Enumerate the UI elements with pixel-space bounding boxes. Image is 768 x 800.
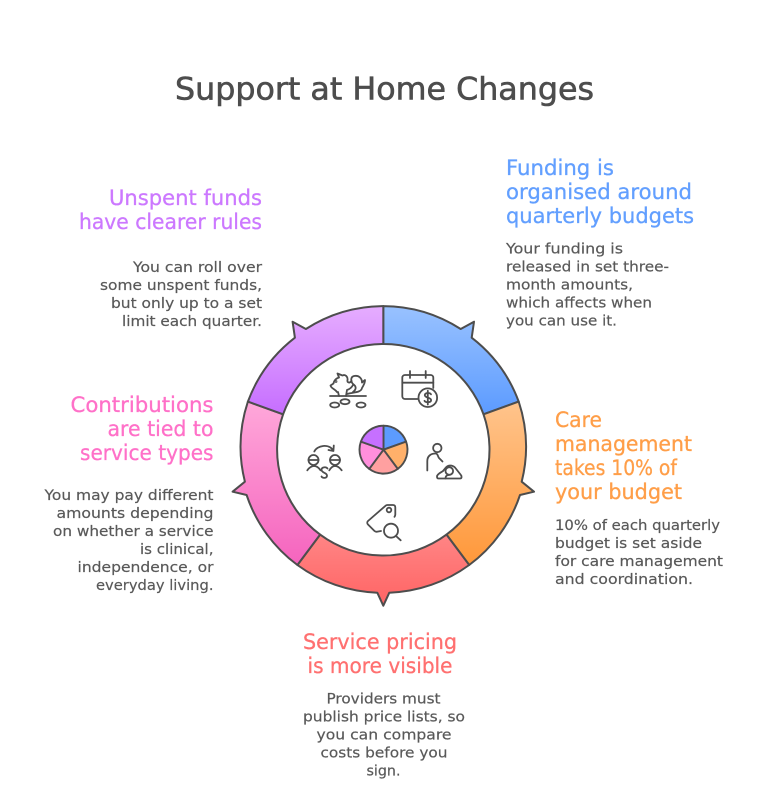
text: care management description: and coordination. (555, 572, 693, 588)
heading: contributions (70, 393, 214, 466)
ring segment: purple (248, 306, 383, 414)
text: unspent funds description: limit each quarter. (122, 314, 262, 330)
heading: unspent funds: have clearer rules (79, 210, 262, 235)
title: Support at Home Changes (175, 72, 594, 108)
text: service pricing description (303, 692, 465, 780)
icon: caregiver with person (427, 444, 462, 478)
text: contributions description: amounts depending (56, 506, 214, 522)
text: funding description: released in set three- (506, 260, 669, 276)
heading: service pricing: Service pricing (303, 630, 457, 655)
text: care management description: 10% of each quarterly (555, 518, 720, 534)
text: funding description (505, 242, 669, 330)
heading: unspent funds (79, 186, 262, 235)
text: contributions description: is clinical, (140, 542, 214, 558)
icon: money exchange between people (307, 446, 342, 478)
text: contributions description (43, 488, 214, 594)
text: care management description: for care management (555, 554, 723, 570)
text: funding description: which affects when (506, 296, 652, 312)
panel: funding (505, 156, 694, 330)
heading: service pricing: is more visible (308, 654, 452, 679)
panel: contributions (43, 393, 214, 594)
heading: care management: Care (555, 408, 602, 433)
panel: unspent funds (79, 186, 262, 330)
text: service pricing description: you can compare (316, 728, 452, 744)
text: unspent funds description: You can roll over (132, 260, 262, 276)
text: contributions description: on whether a service (53, 524, 214, 540)
text: care management description: budget is set aside (555, 536, 702, 552)
heading: unspent funds: Unspent funds (109, 186, 262, 211)
heading: funding: organised around (506, 180, 692, 205)
ring segment: pink (233, 402, 320, 565)
text: service pricing description: publish price lists, so (303, 710, 465, 726)
icon: piggy bank and squirrel (330, 374, 366, 408)
text: contributions description: You may pay different (43, 488, 214, 504)
icon: calendar with dollar (402, 371, 437, 407)
heading: care management (555, 408, 692, 505)
text: unspent funds description (100, 260, 262, 330)
heading: contributions: Contributions (70, 393, 214, 418)
ring segment: red (297, 535, 469, 606)
heading: care management: your budget (555, 480, 682, 505)
heading: funding: Funding is (506, 156, 614, 181)
panel: care management (555, 408, 723, 588)
text: funding description: Your funding is (505, 242, 623, 258)
heading: service pricing (303, 630, 457, 679)
text: care management description (555, 518, 723, 588)
text: unspent funds description: but only up to a set (111, 296, 262, 312)
heading: funding: quarterly budgets (506, 204, 694, 229)
ring segment: blue (383, 306, 519, 414)
heading: care management: management (555, 432, 692, 457)
panel: service pricing (303, 630, 465, 780)
text: funding description: month amounts, (506, 278, 633, 294)
center pie (360, 426, 407, 474)
text: service pricing description: costs before you (320, 746, 448, 762)
icon: price tag with magnifier (367, 505, 401, 540)
heading: contributions: are tied to (108, 417, 214, 442)
text: funding description: you can use it. (506, 314, 617, 330)
heading: contributions: service types (80, 441, 214, 466)
text: service pricing description: sign. (366, 764, 400, 780)
text: contributions description: independence, or (78, 560, 214, 576)
ring diagram (233, 306, 534, 606)
text: contributions description: everyday living. (96, 578, 214, 594)
heading: care management: takes 10% of (555, 456, 677, 481)
ring segment: orange (446, 402, 534, 565)
heading: funding (506, 156, 694, 229)
text: service pricing description: Providers must (326, 692, 441, 708)
text: unspent funds description: some unspent funds, (100, 278, 262, 294)
